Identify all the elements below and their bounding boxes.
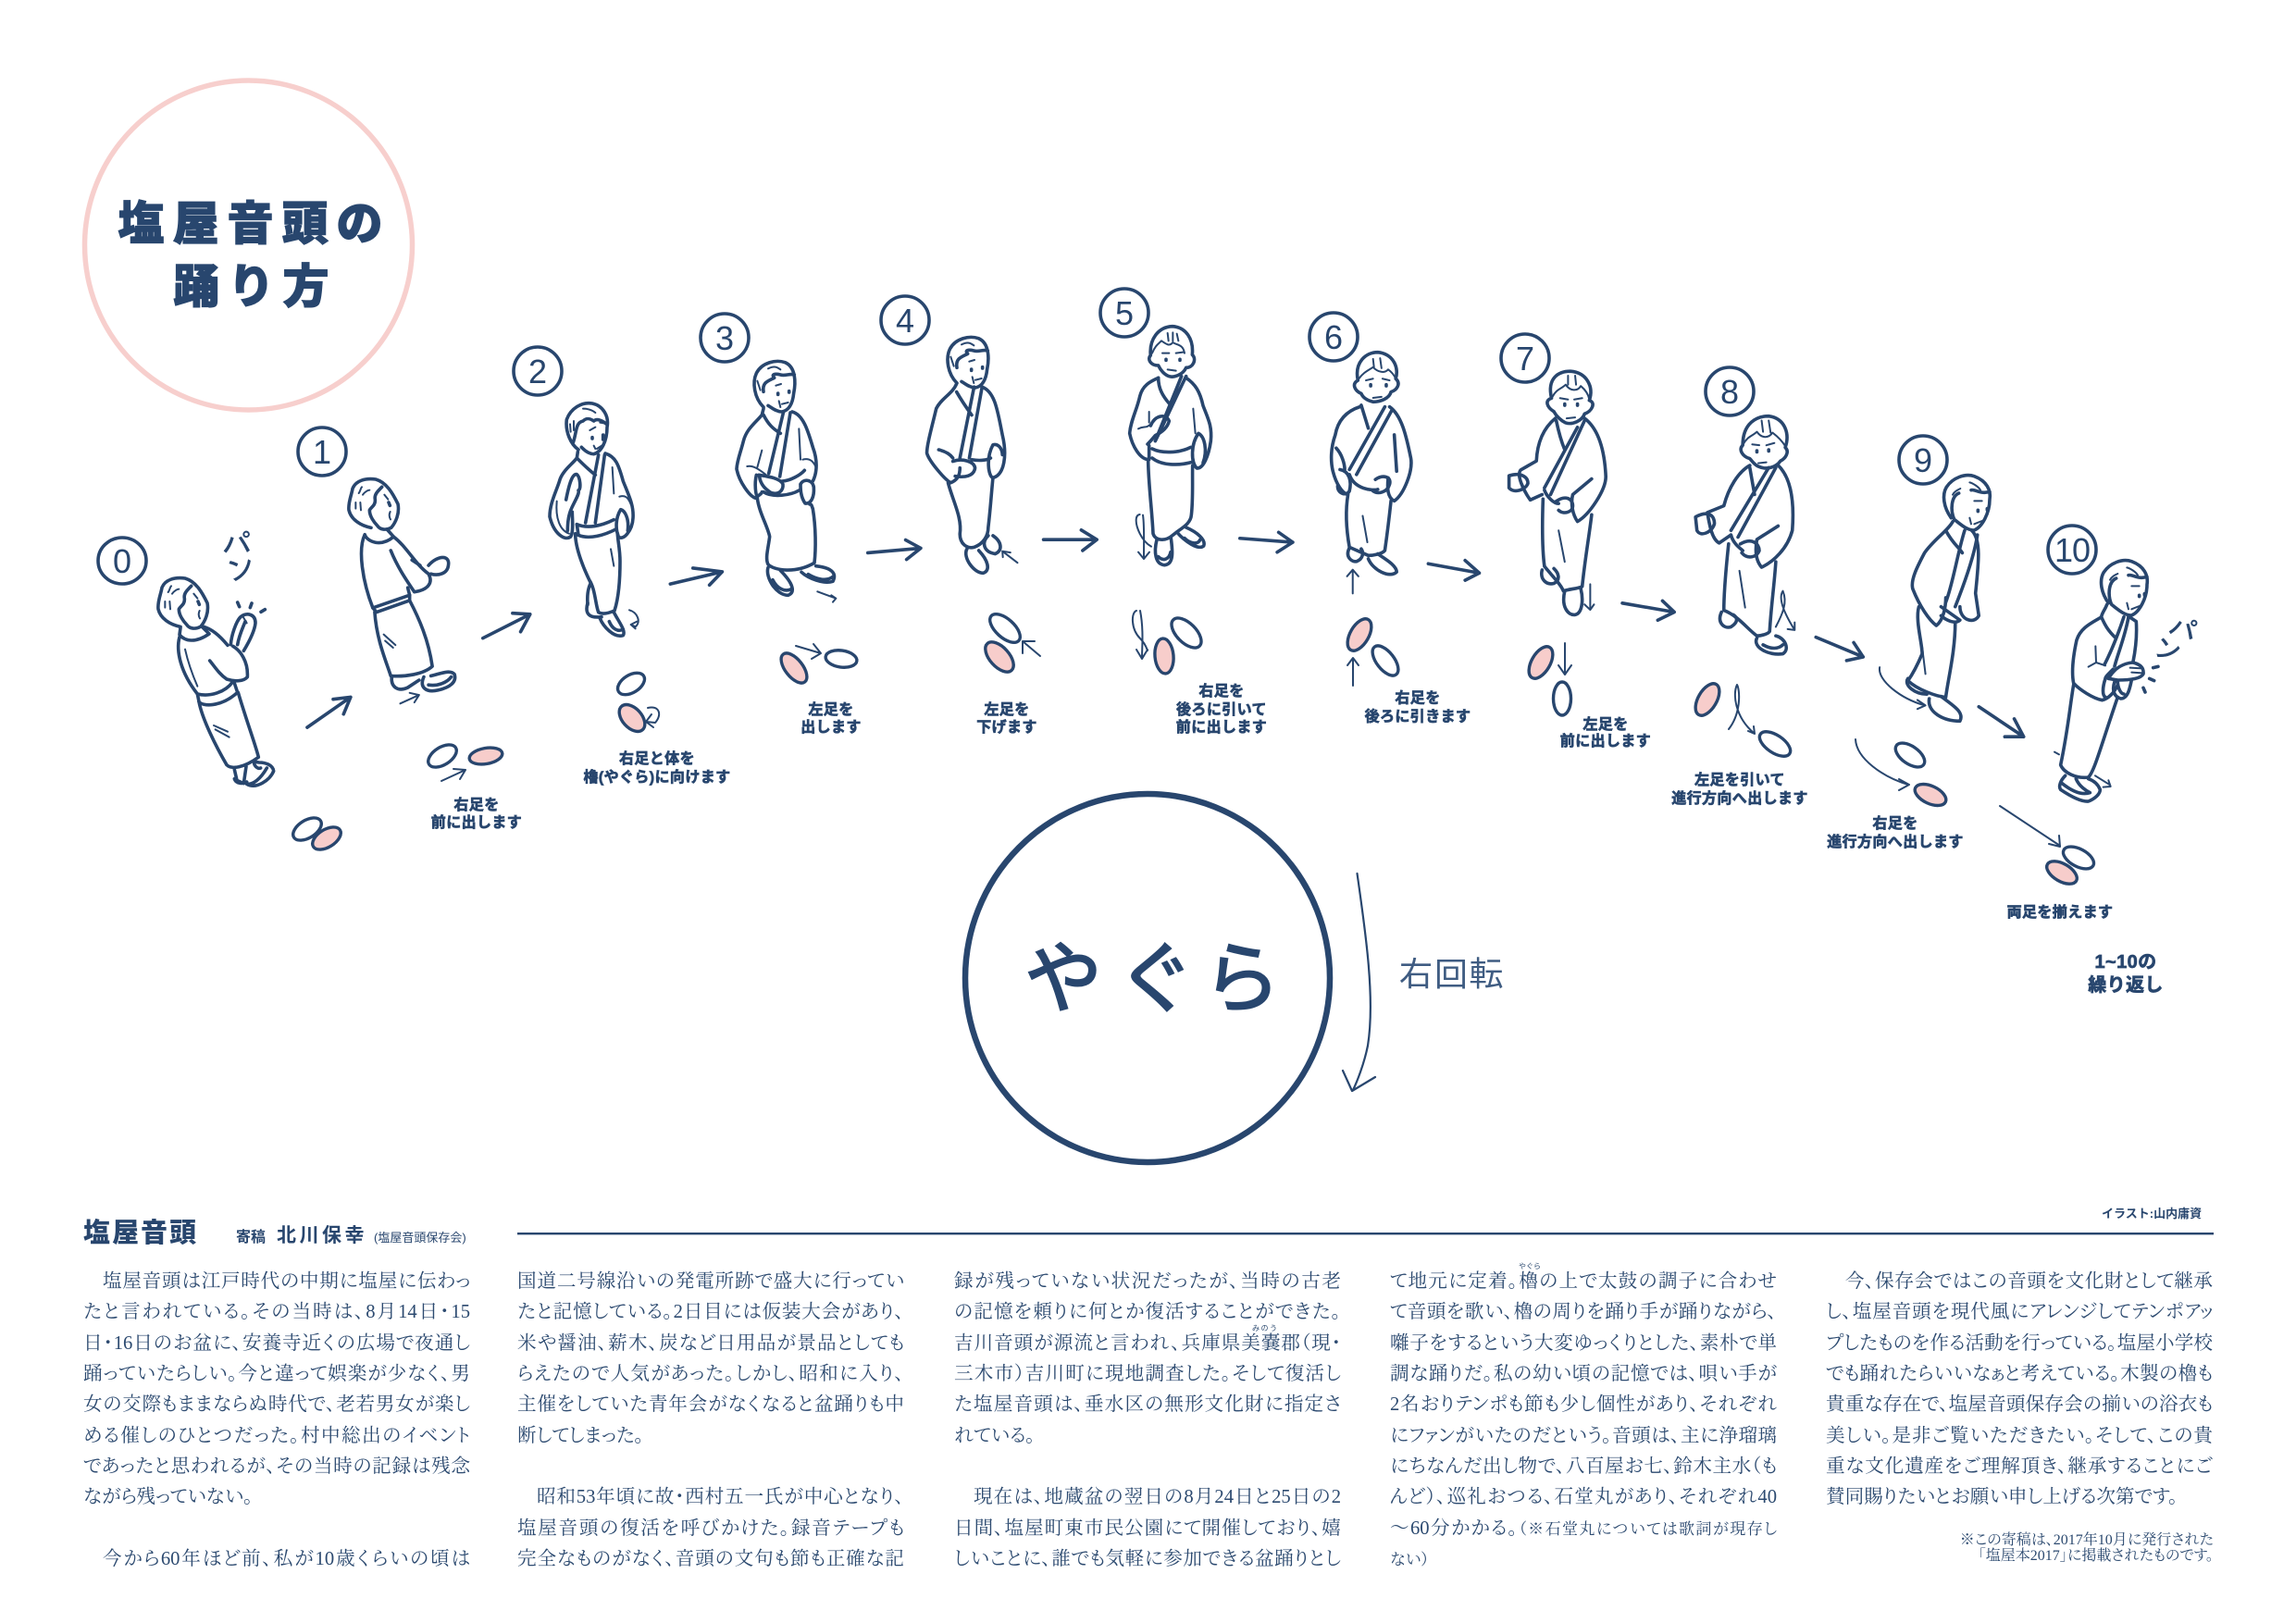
body column 4 [1390,1270,1777,1568]
body column 3: た塩屋音頭は、垂水区の無形文化財に指定さ [954,1394,1341,1415]
caption 7: 前に出します [1560,732,1651,750]
arrow 3 to 4 [868,540,921,560]
step number 7 [1501,334,1549,382]
step number 7: 7 [1516,340,1534,378]
footnote: ※この寄稿は、2017年10月に発行された [1960,1532,2214,1548]
body column 2: 主催をしていた青年会がなくなると盆踊りも中 [517,1394,904,1415]
dancer 1 [349,479,455,703]
body column 3: 録が残っていない状況だったが、当時の古老 [954,1271,1341,1292]
dancer 4 [927,337,1017,573]
body column 5: し、塩屋音頭を現代風にアレンジしてテンポアッ [1826,1302,2213,1322]
step number 3 [701,314,749,362]
body column 3: れている。 [954,1426,1036,1446]
body column 3: しいことに、誰でも気軽に参加できる盆踊りとし [954,1549,1341,1569]
body column 2: 昭和53年頃に故・西村五一氏が中心となり、 [537,1487,904,1507]
dancer 5 [1130,327,1211,565]
body column 4: ない） [1390,1551,1429,1568]
body column 2: 塩屋音頭の復活を呼びかけた。録音テープも [517,1518,904,1539]
footnote: 「塩屋本2017」に掲載されたものです。 [1979,1548,2214,1564]
caption 6: 後ろに引きます [1365,707,1471,725]
body column 4: ～60分かかる。（※石堂丸については歌詞が現存し [1390,1518,1777,1539]
body column 1: 塩屋音頭は江戸時代の中期に塩屋に伝わっ [103,1271,470,1292]
caption: repeat: 1~10の [2094,952,2157,973]
dancer 3 [737,361,836,602]
body column 2: たと記憶している。2日目には仮装大会があり、 [517,1302,904,1322]
caption 8: 左足を引いて [1694,773,1785,788]
footnote [1960,1531,2214,1564]
body column 3: 三木市）吉川町に現地調査した。そして復活し [954,1364,1341,1384]
rotation label: 右回転 [1398,956,1504,991]
body column 3: 日間、塩屋町東市民公園にて開催しており、嬉 [954,1518,1341,1539]
foot diagram 0 [290,813,344,854]
caption 2: 櫓(やぐら)に向けます [583,769,731,786]
caption 5: 前に出します [1176,718,1267,736]
title badge [85,81,413,410]
dancer 2 [550,403,639,636]
arrow 6 to 7 [1428,561,1479,580]
caption 5: 後ろに引いて [1176,700,1267,718]
step number 2: 2 [528,353,547,390]
step number 4 [881,296,929,344]
yagura circle [965,794,1330,1162]
dancer 6 [1332,353,1411,593]
step number 8: 8 [1720,373,1739,411]
dancer 0 [158,578,274,786]
dancer 10 [2054,561,2158,801]
caption 1: 右足を [453,798,500,813]
caption 9: 右足を [1872,816,1918,832]
body column 3: 現在は、地蔵盆の翌日の8月24日と25日の2 [974,1487,1341,1507]
body column 1: める催しのひとつだった。村中総出のイベント [83,1426,470,1446]
body column 1: 女の交際もままならぬ時代で、老若男女が楽し [83,1394,470,1415]
step number 3: 3 [715,319,734,357]
body column 4: て音頭を歌い、櫓の周りを踊り手が踊りながら、 [1390,1302,1777,1322]
arrow 4 to 5 [1044,530,1097,551]
arrow 7 to 8 [1622,601,1674,620]
title badge: 塩屋音頭の [118,198,391,250]
title badge: 踊り方 [174,261,337,313]
body column 1: であったと思われるが、その当時の記録は残念 [83,1456,470,1477]
sound effect: pan 2: ン [2151,632,2186,667]
body column 4: にファンがいたのだという。音頭は、主に浄瑠璃 [1390,1426,1777,1446]
dancer 9 [1880,476,1990,721]
caption 9: 進行方向へ出します [1827,833,1964,850]
step number 9: 9 [1914,441,1932,479]
arrow 0 to 1 [307,697,351,727]
step number 0: 0 [113,542,131,580]
foot diagram 4 [980,609,1040,677]
step number 8 [1706,367,1754,415]
step number 5: 5 [1115,294,1134,332]
step number 10: 10 [2054,531,2090,569]
arrow 2 to 3 [670,568,722,585]
caption 2: 右足と体を [619,751,695,767]
foot diagram 7 [1524,643,1571,715]
body column 5: でも踊れたらいいなぁと考えている。木製の櫓も [1826,1364,2213,1384]
foot diagram 9 [1855,738,1949,810]
body column 2: 国道二号線沿いの発電所跡で盛大に行ってい [517,1271,904,1292]
body column 4: て地元に定着。櫓の上で太鼓の調子に合わせ [1390,1271,1777,1292]
section rule [517,1233,2214,1234]
sound effect: pan: ン [223,551,259,587]
arrow 8 to 9 [1816,638,1863,661]
body column 1: 日・16日のお盆に、安養寺近くの広場で夜通し [83,1333,470,1354]
step number 6 [1309,313,1358,361]
sound effect: pan 2: パ [2166,612,2201,647]
foot diagram 6 [1343,615,1403,686]
body column 2 [517,1271,904,1569]
byline: 寄稿 北川保幸 (塩屋音頭保存会) [236,1225,466,1246]
caption 10: 両足を揃えます [2007,903,2113,921]
body column 3: 吉川音頭が源流と言われ、兵庫県美嚢郡（現・ [954,1333,1341,1354]
ruby: minou: みのう [1252,1323,1279,1333]
body column 4: んど）、巡礼おつる、石堂丸があり、それぞれ40 [1390,1487,1777,1507]
step number 2 [514,347,562,395]
body column 4: 調な踊りだ。私の幼い頃の記憶では、唄い手が [1390,1364,1777,1384]
arrow 5 to 6 [1240,532,1293,552]
body column 5: 美しい。是非ご覧いただきたい。そして、この貴 [1826,1426,2213,1446]
body column 5: 重な文化遺産をご理解頂き、継承することにご [1826,1456,2213,1477]
step number 1: 1 [313,433,331,471]
body column 5: 貴重な存在で、塩屋音頭保存会の揃いの浴衣も [1826,1394,2213,1415]
caption 7: 左足を [1582,717,1629,733]
foot diagram 3 [776,644,858,688]
body column 1: 踊っていたらしい。今と違って娯楽が少なく、男 [83,1364,470,1384]
body column 2: らえたので人気があった。しかし、昭和に入り、 [517,1364,904,1384]
rotation arrow [1343,873,1375,1091]
body column 5 [1826,1270,2213,1507]
step number 9 [1899,436,1947,484]
ruby: yagura: やぐら [1519,1261,1541,1271]
yagura circle: やぐら [1024,935,1281,1022]
caption 3: 出します [800,719,862,736]
body column 1: たと言われている。その当時は、8月14日・15 [83,1302,470,1322]
foot diagram 2 [614,668,659,737]
step number 4: 4 [896,302,914,340]
caption 3: 左足を [808,702,854,718]
step number 1 [298,427,346,476]
body column 2: 米や醤油、薪木、炭など日用品が景品としても [517,1333,904,1354]
body column 5: 賛同賜りたいとお願い申し上げる次第です。 [1826,1487,2178,1507]
body column 4: 囃子をするという大変ゆっくりとした、素朴で単 [1390,1333,1777,1354]
dancer 7 [1509,371,1606,614]
caption: repeat: 繰り返し [2088,974,2164,996]
caption 5: 右足を [1198,684,1245,700]
caption 1: 前に出します [431,813,522,831]
illustration credit: イラスト:山内庸資 [2102,1207,2202,1220]
arrow 1 to 2 [483,613,530,638]
body column 3: の記憶を頼りに何とか復活することができた。 [954,1302,1341,1322]
step number 5 [1100,289,1148,337]
foot diagram 5 [1133,611,1207,675]
foot diagram 8 [1691,680,1794,762]
body column 2: 断してしまった。 [517,1426,644,1446]
step number 10 [2048,526,2096,574]
step number 6: 6 [1324,318,1343,356]
caption 4: 下げます [976,719,1037,736]
caption 4: 左足を [984,702,1030,718]
body column 1 [83,1271,470,1569]
arrow 9 to 10 [1979,707,2024,737]
body column 1: 今から60年ほど前、私が10歳くらいの頃は [103,1549,470,1569]
body column 4: 2名おりテンポも節も少し個性があり、それぞれ [1390,1394,1777,1415]
dancer 8 [1695,416,1794,654]
section heading: 塩屋音頭 [83,1219,198,1248]
caption 6: 右足を [1395,690,1441,707]
body column 4: にちなんだ出し物で、八百屋お七、鈴木主水（も [1390,1456,1777,1477]
body column 3 [954,1271,1341,1569]
caption 8: 進行方向へ出します [1671,789,1808,807]
foot diagram 1 [425,740,503,781]
sound effect: pan: パ [222,529,252,559]
body column 1: ながら残っていない。 [83,1487,253,1507]
step number 0 [98,538,146,584]
foot diagram 10 [2000,806,2097,888]
body column 5: 今、保存会ではこの音頭を文化財として継承 [1845,1271,2213,1292]
body column 5: プしたものを作る活動を行っている。塩屋小学校 [1826,1333,2213,1354]
body column 2: 完全なものがなく、音頭の文句も節も正確な記 [517,1549,904,1569]
